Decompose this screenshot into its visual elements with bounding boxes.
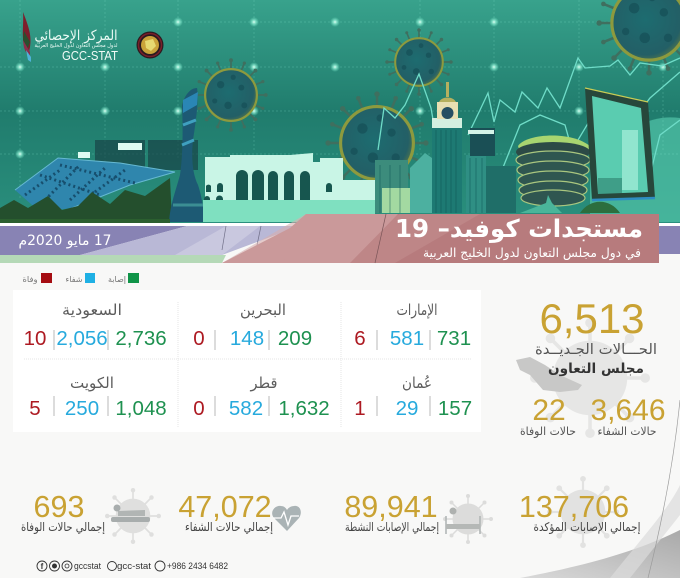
country: Qatar: 1,632 <box>278 397 330 420</box>
new cases total: 6,513 <box>539 295 645 342</box>
country: Saudi Arabia <box>24 301 167 350</box>
country: UAE: الإمارات <box>396 301 438 319</box>
social contact row: gcc-stat <box>117 561 151 572</box>
country: Oman: 157 <box>438 397 472 420</box>
total confirmed <box>519 476 640 548</box>
panel: new GCC cases <box>516 295 666 439</box>
country: Bahrain <box>193 301 312 350</box>
country: Kuwait: الكويت <box>70 374 114 392</box>
deaths number: 22 <box>532 394 566 427</box>
banner: teal skyline illustration <box>0 0 680 223</box>
Makkah clock tower and towers <box>375 82 516 213</box>
Doha torch tower <box>169 88 204 222</box>
recoveries label: حالات الشفاء <box>598 424 656 438</box>
social contact row: f <box>41 562 44 571</box>
social contact row <box>37 561 228 572</box>
country: Saudi Arabia: 10 <box>24 327 46 350</box>
legend: إصابة <box>108 275 126 285</box>
active number: 89,941 <box>344 490 438 524</box>
logo subtitle: لدول مجلس التعاون لدول الخليج العربية <box>34 43 118 49</box>
legend: وفاة <box>22 275 38 284</box>
country: Oman: عُمان <box>402 374 432 392</box>
GCC label: مجلس التعاون <box>548 361 644 377</box>
country: Oman <box>354 374 472 420</box>
Bahrain round building <box>516 135 590 213</box>
recovered label: إجمالي حالات الشفاء <box>185 520 273 534</box>
country: Qatar: قطر <box>250 374 278 392</box>
country: Kuwait: 1,048 <box>115 397 167 420</box>
title: مستجدات كوفيد– 19 <box>395 214 643 243</box>
virus: behind skyline <box>325 91 429 195</box>
country: Kuwait: 5 <box>29 397 41 420</box>
Dubai frame <box>585 88 655 200</box>
total deaths <box>21 488 161 544</box>
Oman opera house <box>203 153 375 222</box>
country: UAE: 581 <box>390 327 424 350</box>
chart line: rising trend <box>378 58 680 190</box>
total active <box>344 490 493 544</box>
legend: شفاء <box>66 275 83 284</box>
country: Qatar: 0 <box>193 397 205 420</box>
icon: virus <box>547 476 619 548</box>
logo latin name: GCC-STAT <box>62 49 118 63</box>
country: Bahrain: 148 <box>230 327 264 350</box>
country: Bahrain: البحرين <box>240 301 286 319</box>
recoveries number: 3,646 <box>590 394 666 427</box>
Kuwait dome building <box>0 158 175 222</box>
country: Oman: 1 <box>354 397 366 420</box>
decorative swoosh bottom right <box>520 400 680 578</box>
new cases label: الحـــالات الجـديــدة <box>535 342 657 358</box>
virus: upper centre <box>194 58 268 132</box>
recovered number: 47,072 <box>178 490 272 524</box>
GCC-STAT logo <box>23 12 118 62</box>
green strip <box>0 255 226 263</box>
virus: top right <box>596 0 680 76</box>
deaths label: إجمالي حالات الوفاة <box>21 520 105 535</box>
GCC emblem <box>136 32 164 58</box>
country: Saudi Arabia: السعودية <box>62 301 122 319</box>
legend <box>22 273 139 285</box>
country: Qatar: 582 <box>229 397 263 420</box>
country: Qatar <box>193 374 330 420</box>
background towers <box>95 140 198 170</box>
logo Arabic name: المركز الإحصائي <box>34 28 118 44</box>
country: UAE <box>354 301 471 350</box>
social contact row: gccstat <box>74 561 101 572</box>
deaths label: حالات الوفاة <box>520 424 576 439</box>
confirmed number: 137,706 <box>519 490 629 524</box>
active label: إجمالي الإصابات النشطة <box>345 520 439 534</box>
date ribbon: purple band <box>0 223 680 255</box>
country: Kuwait: 250 <box>65 397 99 420</box>
icon: virus with GCC map <box>516 318 650 438</box>
icon: patient on bed <box>105 488 161 544</box>
country: Kuwait <box>29 374 167 420</box>
subtitle: في دول مجلس التعاون لدول الخليج العربية <box>423 245 641 261</box>
social contact row: +986 2434 6482 <box>167 561 228 572</box>
country: Bahrain: 209 <box>278 327 312 350</box>
total recovered <box>178 490 301 534</box>
country: Bahrain: 0 <box>193 327 205 350</box>
country: Saudi Arabia: 2,056 <box>56 327 108 350</box>
country: UAE: 6 <box>354 327 366 350</box>
country: UAE: 731 <box>437 327 471 350</box>
confirmed label: إجمالي الإصابات المؤكدة <box>534 520 640 535</box>
panel: country statistics table <box>13 290 481 432</box>
title ribbon: maroon <box>222 214 659 263</box>
country: Oman: 29 <box>396 397 418 420</box>
date text: 17 مايو 2020م <box>18 233 112 249</box>
icon: hospital bed <box>443 494 493 544</box>
deaths number: 693 <box>34 490 84 524</box>
country: Saudi Arabia: 2,736 <box>115 327 167 350</box>
virus: centre right <box>385 28 453 96</box>
icon: heart with pulse <box>272 506 301 531</box>
